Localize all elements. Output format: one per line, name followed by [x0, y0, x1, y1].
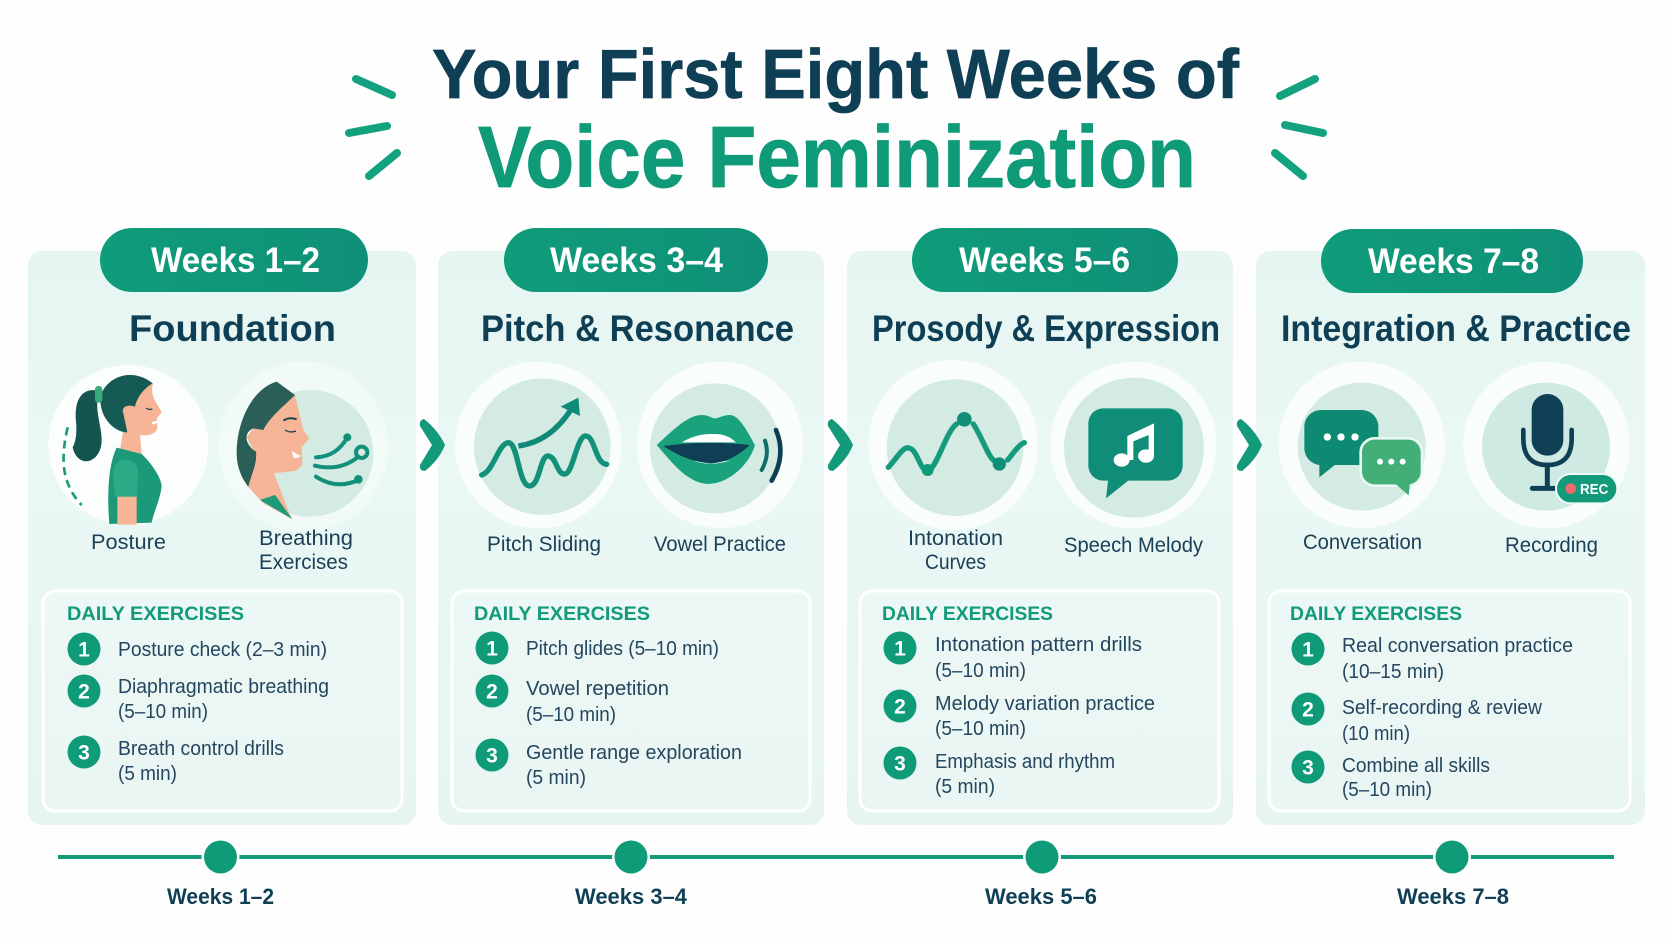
box: daily exercises: 1: [1302, 638, 1314, 662]
pill: weeks 5-6: Weeks 5–6: [959, 241, 1130, 280]
box: daily exercises: Melody variation practice: [935, 692, 1155, 715]
box: daily exercises: Vowel repetition: [526, 677, 669, 700]
box: daily exercises: 1: [894, 638, 906, 660]
label: speech melody: Speech Melody: [1064, 534, 1203, 557]
box: daily exercises: 1: [486, 638, 498, 660]
timeline marker: weeks 5-6: Weeks 5–6: [985, 884, 1097, 909]
timeline marker: weeks 7-8: Weeks 7–8: [1397, 884, 1509, 909]
box: daily exercises: DAILY EXERCISES: [882, 604, 1053, 625]
box: daily exercises: (5–10 min): [935, 717, 1026, 740]
box: daily exercises: (5–10 min): [526, 703, 616, 726]
box: daily exercises: [1269, 591, 1630, 811]
label: breathing exercises: Exercises: [259, 551, 348, 574]
label: posture: Posture: [91, 531, 166, 554]
panel: weeks 3-4 pitch and resonance: [438, 228, 824, 825]
box: daily exercises: (5–10 min): [118, 700, 208, 723]
box: daily exercises: 2: [486, 680, 498, 704]
box: daily exercises: [43, 591, 402, 811]
box: daily exercises: 3: [1302, 756, 1314, 780]
label: intonation curves: Intonation: [908, 527, 1003, 550]
box: daily exercises: DAILY EXERCISES: [1290, 604, 1462, 625]
title: [432, 35, 1240, 206]
box: daily exercises: DAILY EXERCISES: [474, 604, 650, 625]
pill: weeks 3-4: Weeks 3–4: [550, 241, 724, 280]
pill: weeks 5-6: [912, 228, 1178, 292]
pill: weeks 1-2: Weeks 1–2: [151, 241, 320, 280]
box: daily exercises: 2: [1302, 698, 1314, 722]
box: daily exercises: 2: [78, 680, 90, 704]
box: daily exercises: Real conversation practice: [1342, 634, 1573, 657]
icon: intonation curves: [868, 360, 1038, 530]
box: daily exercises: DAILY EXERCISES: [67, 604, 244, 625]
label: intonation curves: [908, 527, 1003, 574]
box: daily exercises: 3: [486, 744, 498, 768]
timeline marker: weeks 5-6: [985, 838, 1097, 909]
label: breathing exercises: Breathing: [259, 527, 353, 550]
box: daily exercises: Pitch glides (5–10 min): [526, 637, 719, 660]
box: daily exercises: Self-recording & review: [1342, 696, 1542, 719]
timeline marker: weeks 3-4: [575, 838, 687, 909]
arrow 2: [828, 419, 853, 471]
label: intonation curves: Curves: [925, 551, 986, 574]
pill: weeks 7-8: [1321, 229, 1583, 293]
box: daily exercises: [452, 591, 810, 811]
box: daily exercises: (5 min): [118, 762, 177, 785]
box: daily exercises: Diaphragmatic breathing: [118, 675, 329, 698]
icon: conversation: [1278, 362, 1445, 528]
box: daily exercises: (5 min): [526, 766, 586, 789]
box: daily exercises: Emphasis and rhythm: [935, 750, 1115, 773]
icon: posture: [48, 365, 208, 525]
heading: pitch and resonance: Pitch & Resonance: [481, 308, 794, 349]
icon: recording microphone: [1463, 362, 1630, 528]
label: pitch sliding: Pitch Sliding: [487, 533, 601, 556]
timeline marker: weeks 3-4: Weeks 3–4: [575, 884, 687, 909]
timeline marker: weeks 7-8: [1397, 838, 1509, 909]
box: daily exercises: [860, 591, 1219, 811]
decorative burst: left: [349, 79, 397, 176]
icon: pitch sliding: [455, 362, 622, 528]
arrow 3: [1237, 419, 1262, 471]
heading: foundation: Foundation: [129, 308, 336, 349]
label: conversation: Conversation: [1303, 531, 1422, 554]
icon: breathing: [218, 362, 388, 532]
box: daily exercises: Combine all skills: [1342, 754, 1490, 777]
decorative burst: right: [1275, 79, 1323, 176]
timeline: [58, 838, 1614, 909]
label: recording: Recording: [1505, 534, 1598, 557]
box: daily exercises: Intonation pattern drills: [935, 633, 1142, 656]
timeline marker: weeks 1-2: Weeks 1–2: [167, 884, 274, 909]
box: daily exercises: (10 min): [1342, 722, 1410, 745]
box: daily exercises: 3: [78, 742, 90, 764]
icon: vowel practice: [637, 362, 803, 528]
box: daily exercises: Posture check (2–3 min): [118, 638, 327, 661]
heading: integration and practice: Integration & Practice: [1281, 308, 1631, 349]
box: daily exercises: (5–10 min): [935, 659, 1026, 682]
label: breathing exercises: [259, 527, 353, 574]
icon: speech melody: [1050, 362, 1217, 528]
box: daily exercises: Gentle range exploration: [526, 741, 742, 764]
title: Voice Feminization: [478, 109, 1196, 206]
box: daily exercises: Breath control drills: [118, 737, 284, 760]
icon: recording microphone: REC: [1580, 482, 1609, 498]
timeline marker: weeks 1-2: [167, 838, 274, 909]
box: daily exercises: 3: [894, 752, 906, 776]
label: vowel practice: Vowel Practice: [654, 533, 786, 556]
panel: weeks 7-8 integration and practice: [1256, 229, 1645, 825]
box: daily exercises: (5 min): [935, 775, 995, 798]
box: daily exercises: (10–15 min): [1342, 660, 1444, 683]
pill: weeks 7-8: Weeks 7–8: [1368, 242, 1539, 281]
arrow 1: [420, 419, 445, 471]
title: Your First Eight Weeks of: [432, 35, 1240, 113]
box: daily exercises: 1: [78, 638, 90, 662]
heading: prosody and expression: Prosody & Expression: [872, 308, 1220, 349]
panel: weeks 1-2 foundation: [28, 228, 416, 825]
pill: weeks 1-2: [100, 228, 368, 292]
pill: weeks 3-4: [504, 228, 768, 292]
panel: weeks 5-6 prosody and expression: [847, 228, 1233, 825]
box: daily exercises: (5–10 min): [1342, 778, 1432, 801]
box: daily exercises: 2: [894, 696, 906, 718]
